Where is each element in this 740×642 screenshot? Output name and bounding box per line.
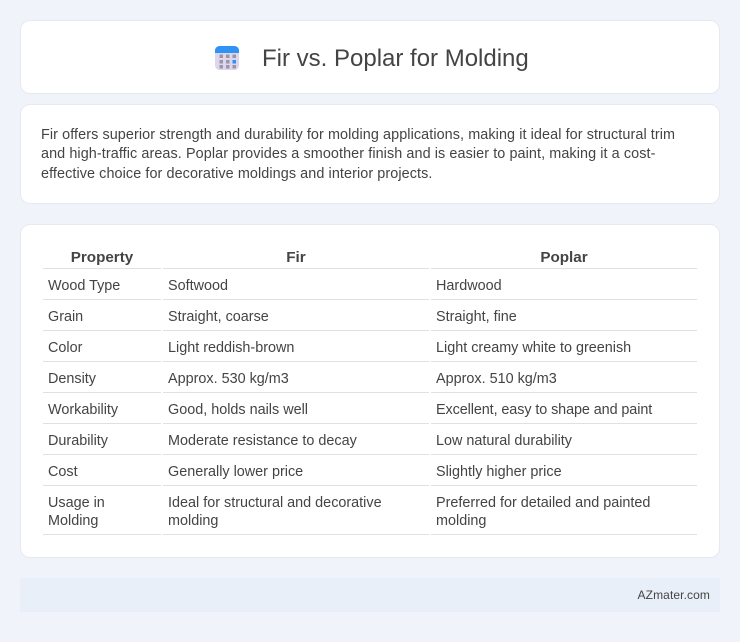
icon: calendar [215,46,239,70]
row: color: Color [48,340,82,356]
row: usage in molding: Molding [48,513,98,529]
row: wood type: Softwood [168,278,228,294]
row: workability [48,402,652,418]
row: durability: Durability [48,433,108,449]
table header [71,249,588,266]
row: wood type: Wood Type [48,278,120,294]
panel: title card [20,20,720,94]
table header: Fir [286,249,306,266]
row: wood type: Hardwood [436,278,502,294]
row: grain: Straight, fine [436,309,517,325]
table header: Property [71,249,133,266]
row: cost: Slightly higher price [436,464,562,480]
row: workability: Good, holds nails well [168,402,308,418]
summary text: and high-traffic areas. Poplar provides a smoother finish and is easier to paint, making it a cost- [41,146,655,162]
row: usage in molding: molding [436,513,486,529]
row: wood type [48,278,502,294]
row: density: Approx. 510 kg/m3 [436,371,557,387]
row: cost: Cost [48,464,78,480]
row: color: Light creamy white to greenish [436,340,631,356]
row: density: Approx. 530 kg/m3 [168,371,289,387]
row: color [48,340,631,356]
row: grain: Grain [48,309,83,325]
panel: summary [20,104,720,204]
row: durability [48,433,572,449]
row: cost: Generally lower price [168,464,303,480]
row: density [48,371,557,387]
row: cost [48,464,562,480]
footer credit: AZmater.com [638,588,710,602]
row: usage in molding: Usage in [48,495,105,511]
row: color: Light reddish-brown [168,340,294,356]
row: grain: Straight, coarse [168,309,269,325]
summary text: Fir offers superior strength and durability for molding applications, making it ideal for structural trim [41,126,675,142]
row: workability: Workability [48,402,118,418]
row: durability: Low natural durability [436,433,572,449]
summary text [41,126,675,182]
row: density: Density [48,371,96,387]
row: usage in molding: Preferred for detailed and painted [436,495,650,511]
title: Fir vs. Poplar for Molding [262,45,529,72]
row: workability: Excellent, easy to shape and paint [436,402,652,418]
footer bar [20,578,720,612]
summary text: effective choice for decorative moldings and interior projects. [41,166,432,182]
row: usage in molding [48,495,650,529]
row: usage in molding: molding [168,513,218,529]
row: usage in molding: Ideal for structural and decorative [168,495,382,511]
row: durability: Moderate resistance to decay [168,433,357,449]
row: grain [48,309,517,325]
table header: Poplar [540,249,588,266]
panel: comparison table [20,224,720,558]
